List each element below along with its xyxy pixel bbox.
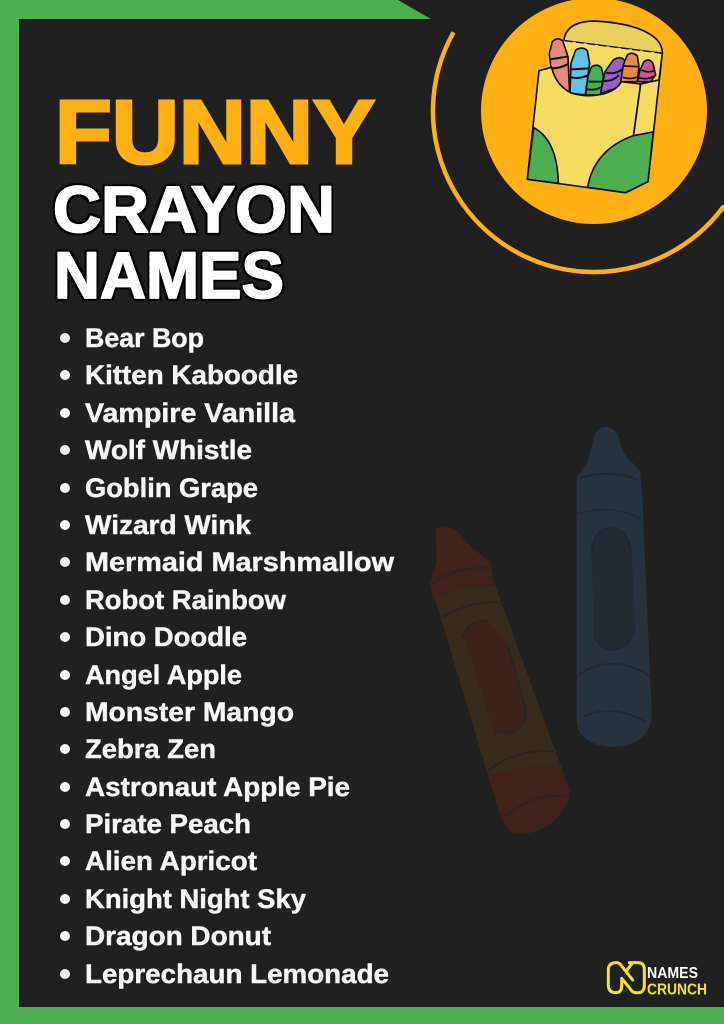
names: Bear Bop (85, 323, 204, 353)
names: Leprechaun Lemonade (85, 959, 389, 989)
icon: crayon box (527, 21, 662, 193)
names: Wolf Whistle (85, 435, 252, 465)
box front (527, 67, 641, 193)
background crayon: orange (430, 527, 570, 834)
names: Zebra Zen (85, 734, 216, 764)
names: Pirate Peach (85, 809, 251, 839)
title line: FUNNY: FUNNY (55, 83, 375, 183)
title line: NAMES: NAMES (54, 238, 284, 312)
names: Dino Doodle (85, 622, 247, 652)
orange ring arc (433, 32, 724, 272)
box back (539, 41, 662, 84)
name list (60, 323, 394, 989)
box lid flap (564, 21, 662, 53)
names: Alien Apricot (85, 846, 257, 876)
background crayon: blue (577, 427, 652, 747)
title (53, 83, 375, 312)
crayon: orange (621, 53, 639, 82)
names: Knight Night Sky (85, 884, 306, 914)
names: Angel Apple (85, 660, 242, 690)
crayon: green (586, 65, 603, 95)
logo text: CRUNCH: CRUNCH (647, 982, 707, 998)
logo mark (608, 963, 644, 993)
title line: CRAYON: CRAYON (53, 172, 335, 246)
orange circle (481, 0, 707, 224)
bullets (60, 333, 70, 979)
logo text: NAMES: NAMES (647, 965, 698, 982)
names: Monster Mango (85, 697, 294, 727)
logo: Names Crunch (608, 963, 707, 998)
crayon: magenta (637, 60, 656, 82)
names: Vampire Vanilla (85, 398, 295, 428)
crayon: purple (601, 58, 626, 93)
crayon: pink (549, 39, 570, 93)
names: Kitten Kaboodle (85, 360, 298, 390)
green corner: right (588, 132, 653, 193)
names: Dragon Donut (85, 921, 271, 951)
box side (626, 53, 662, 193)
names (85, 323, 394, 989)
names: Astronaut Apple Pie (85, 772, 350, 802)
crayon: blue (570, 48, 590, 95)
green corner: left (527, 128, 558, 183)
names: Robot Rainbow (85, 585, 286, 615)
names: Wizard Wink (85, 510, 251, 540)
names: Goblin Grape (85, 473, 258, 503)
names: Mermaid Marshmallow (85, 547, 394, 577)
